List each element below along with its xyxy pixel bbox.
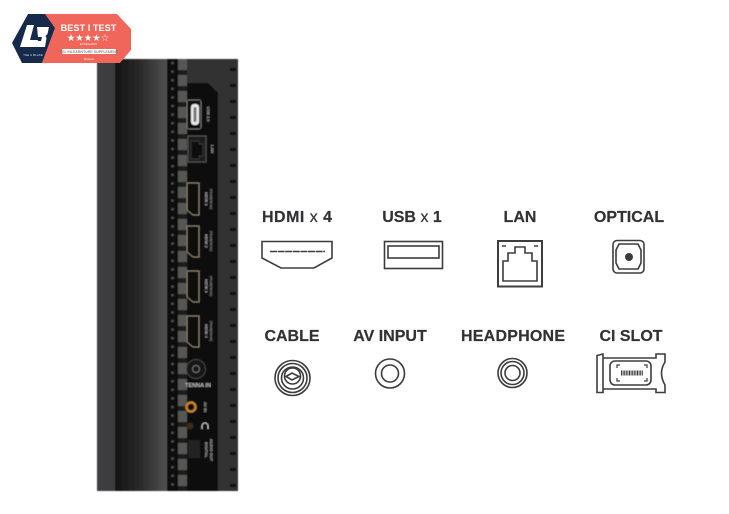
HDMI 3 port: HDMI 3: [204, 279, 209, 294]
icon: AV input: [376, 359, 404, 388]
TV bezel strip: [97, 59, 115, 491]
USB port: [187, 100, 211, 129]
badge heading: BEST I TEST: [61, 23, 117, 33]
headphone jack: [186, 422, 208, 430]
icon: LAN: [498, 241, 542, 286]
perforated vent column: [167, 59, 178, 491]
icon detail: HDMI pins: [270, 250, 325, 252]
connector legend: [262, 209, 665, 396]
icon: optical: [613, 240, 644, 273]
label: AV INPUT: AV INPUT: [353, 328, 427, 345]
AV port: [186, 402, 208, 412]
icon: USB: [384, 242, 442, 268]
TV side view with ports: [97, 59, 238, 491]
label: CI SLOT: CI SLOT: [599, 328, 663, 345]
icon: CI slot: [597, 354, 665, 392]
icon: HDMI: [262, 242, 332, 268]
label: LAN: LAN: [504, 209, 536, 226]
right casing: [187, 59, 238, 491]
HDMI 2 port: [187, 226, 213, 257]
label: HDMI x 4: HDMI x 4: [262, 209, 332, 226]
HDMI 4 port: (Headphone): [209, 321, 213, 341]
icon: headphone: [498, 358, 527, 388]
antenna port: [185, 360, 211, 389]
HDMI 3 port: [187, 271, 213, 302]
optical port: [188, 439, 214, 462]
LAN port: [188, 136, 215, 162]
badge footer: Review: [84, 57, 95, 61]
icon: cable: [275, 360, 310, 396]
label: USB x 1: USB x 1: [382, 209, 442, 226]
optical port: AUDIO OUT: [209, 439, 214, 462]
HDMI 1 port: HDMI 1: [204, 192, 209, 207]
label: OPTICAL: OPTICAL: [594, 209, 664, 226]
label: CABLE: CABLE: [264, 328, 320, 345]
HDMI 3 port: (Headphone): [209, 276, 213, 296]
HDMI 2 port: (Headphone): [209, 231, 213, 251]
TV rear gradient surface: [115, 59, 167, 491]
AV port: AV IN: [203, 402, 208, 412]
LAN port: LAN: [210, 145, 215, 153]
badge rating note: EXCELLENT: [80, 42, 97, 46]
HDMI 4 port: [187, 316, 213, 347]
label: HEADPHONE: HEADPHONE: [461, 328, 565, 345]
optical port: DIGITAL: [204, 442, 209, 458]
HDMI 1 port: [187, 183, 213, 215]
HDMI 1 port: (Headphone): [209, 189, 213, 209]
black port panel: [187, 83, 218, 491]
badge note: TEL INLEARNTURE SUPPLEMENT: [60, 50, 119, 54]
badge stars: ★★★★☆: [67, 33, 109, 44]
badge red ribbon: [42, 14, 131, 63]
logo hexagon: THE G BLAKE: [23, 53, 43, 57]
USB port: USB 2.0: [206, 106, 211, 122]
badge: Best I Test: [12, 14, 131, 63]
HDMI 2 port: HDMI 2: [204, 234, 209, 249]
HDMI 4 port: HDMI 4: [204, 324, 209, 339]
ribbed column: [178, 59, 187, 491]
antenna port: TENNA IN: [185, 383, 211, 389]
